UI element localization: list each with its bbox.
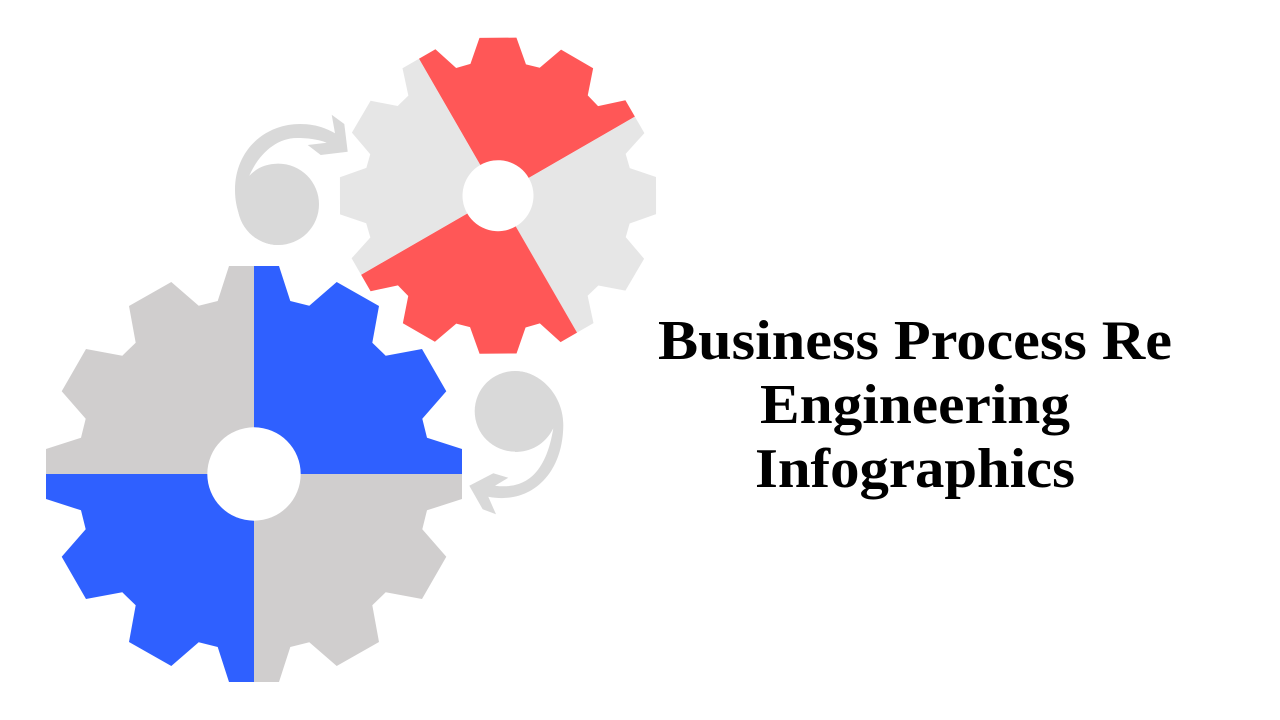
arrow: curved top-left arrow: [235, 115, 348, 245]
title: [658, 310, 1172, 500]
title: Engineering: [760, 374, 1070, 436]
title: Infographics: [755, 438, 1075, 500]
small gear: red and light grey: [282, 0, 714, 412]
large gear: blue and grey: [46, 266, 462, 682]
arrow: curved bottom-right arrow: [469, 371, 563, 514]
title: Business Process Re: [658, 310, 1172, 372]
